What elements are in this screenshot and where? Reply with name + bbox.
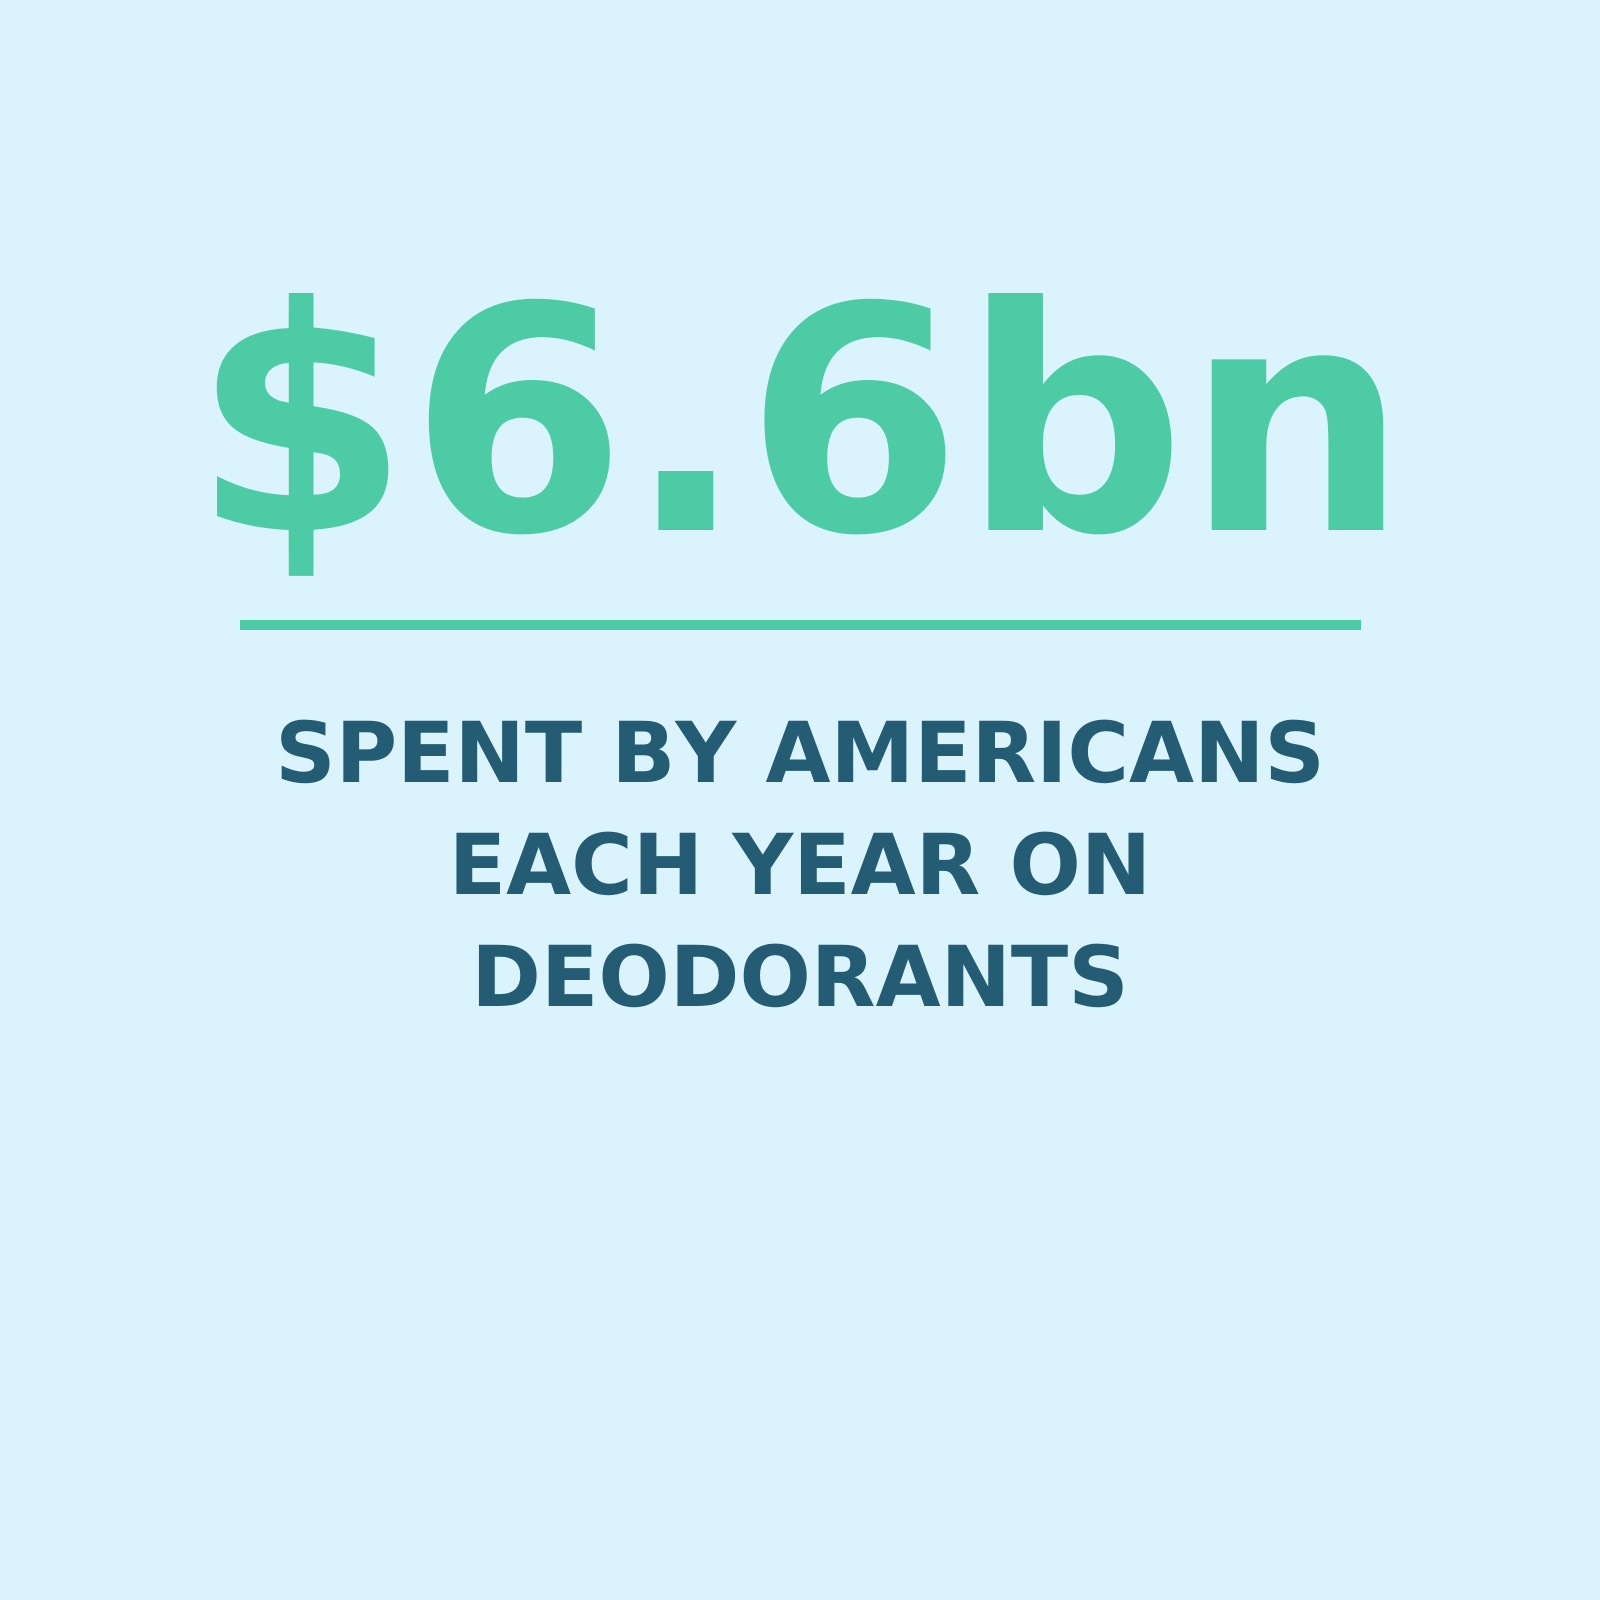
caption line 3: DEODORANTS xyxy=(471,928,1129,1026)
caption text xyxy=(275,704,1325,1026)
caption line 1: SPENT BY AMERICANS xyxy=(275,704,1325,802)
caption line 2: EACH YEAR ON xyxy=(449,816,1151,914)
headline figure: $6.6bn xyxy=(192,240,1408,604)
divider rule xyxy=(240,620,1361,630)
